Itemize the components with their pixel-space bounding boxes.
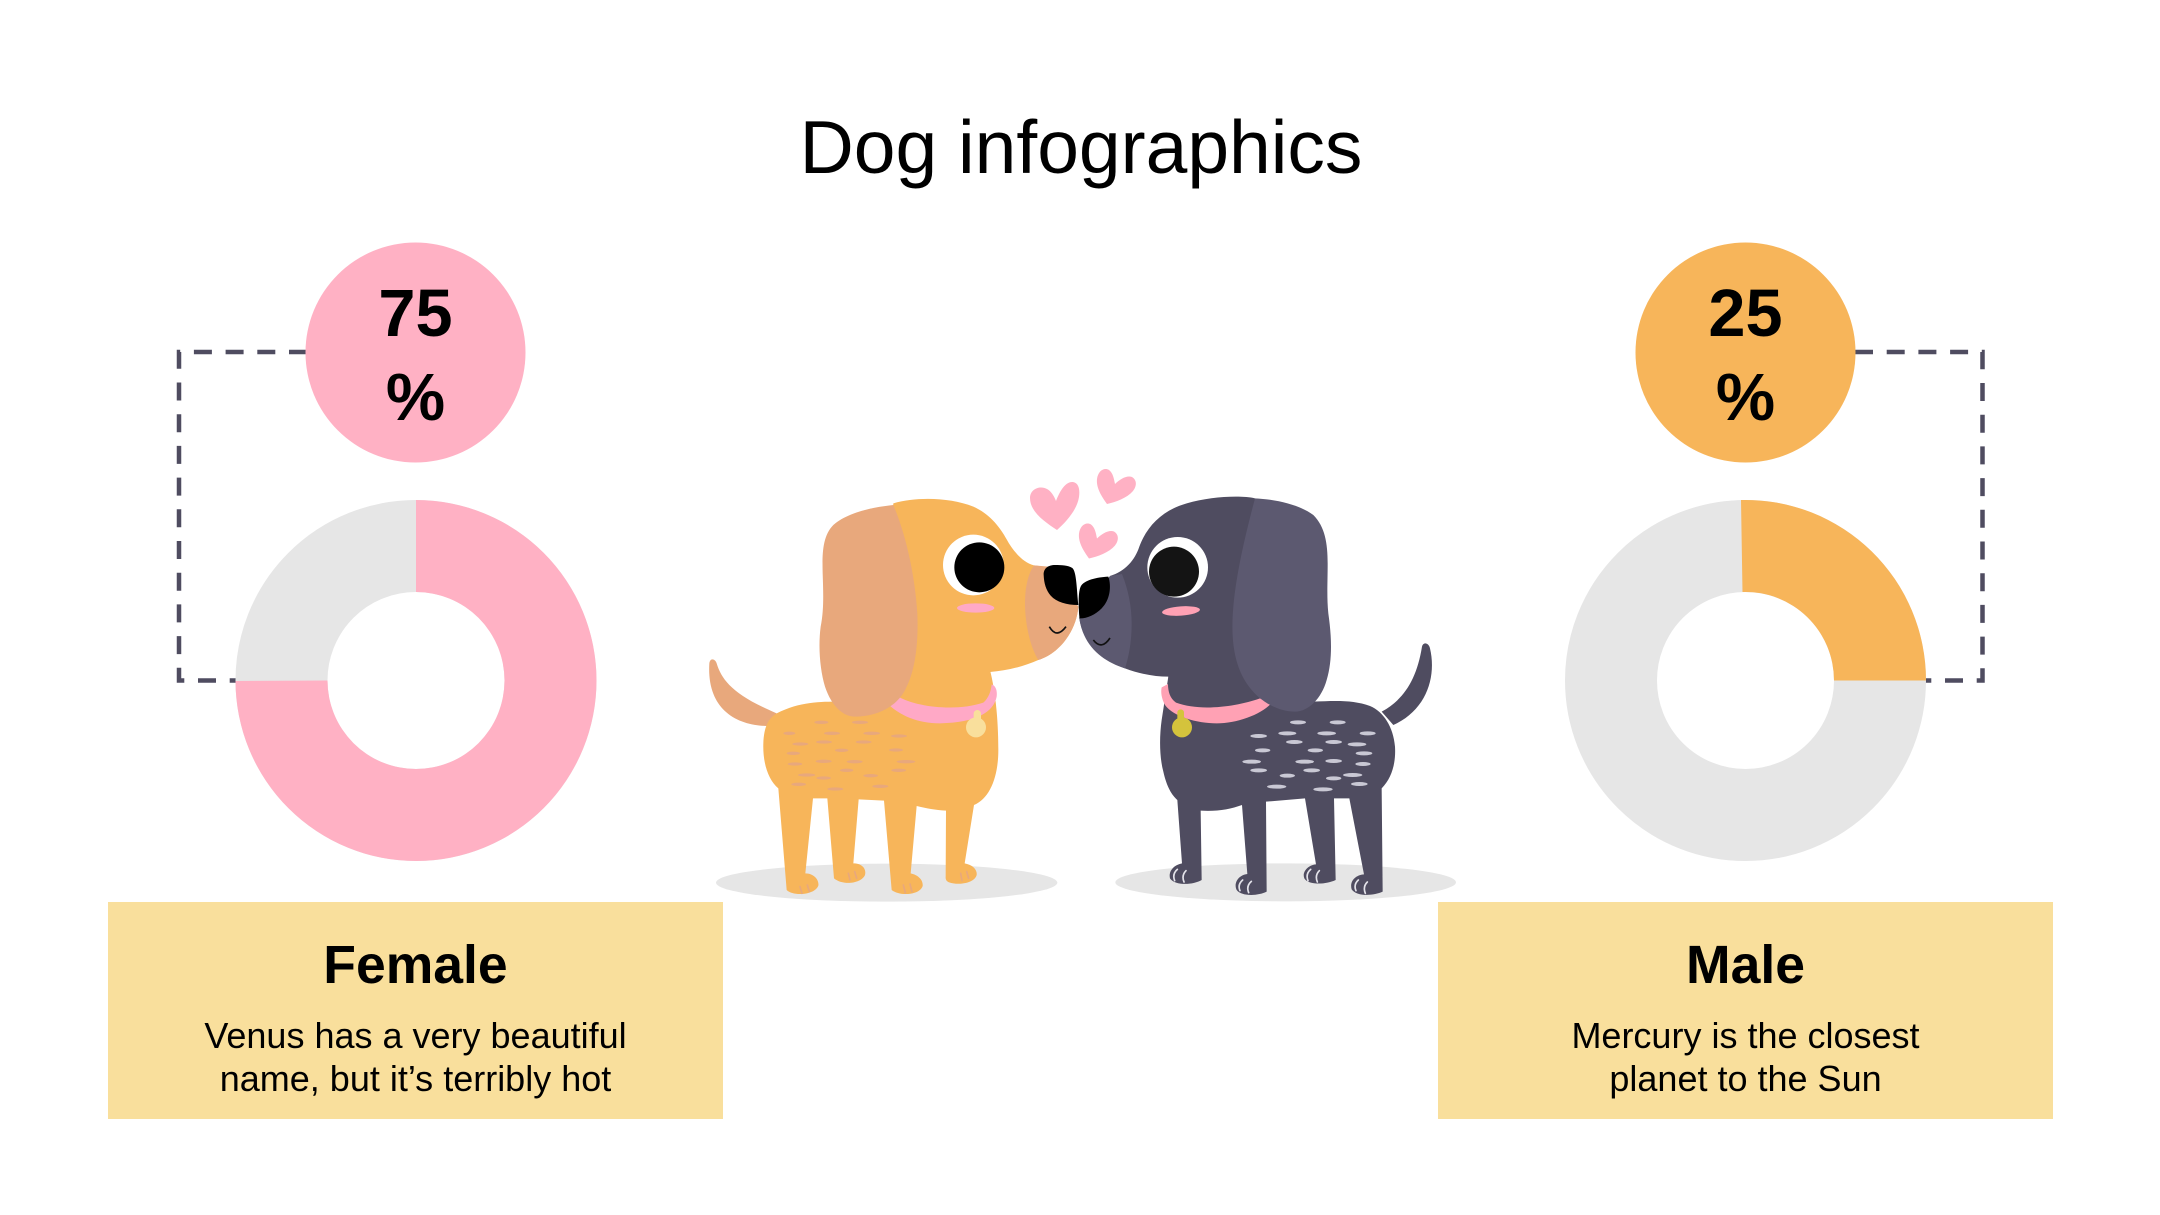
tail (1382, 643, 1432, 725)
donut chart: male 25 percent (1611, 500, 1926, 815)
badge: 25 percent: 25 (1708, 277, 1783, 351)
ground shadow (716, 864, 1057, 902)
name tag (966, 710, 986, 737)
claws (1174, 869, 1367, 893)
hearts (1030, 469, 1136, 558)
cheek (957, 603, 994, 613)
nose (1044, 565, 1078, 605)
badge: 75 percent: % (386, 361, 445, 435)
panel: female (108, 242, 723, 1119)
label box: female (108, 902, 723, 1119)
smile (1093, 638, 1110, 645)
badge: 25 percent (1636, 242, 1856, 462)
head (1079, 497, 1263, 707)
name tag (1172, 709, 1192, 737)
connector: female dashed line (179, 352, 307, 680)
label box: male: Mercury is the closest (1571, 1015, 1920, 1056)
nose (1079, 577, 1110, 618)
eye (1147, 537, 1208, 598)
eye (943, 535, 1004, 595)
smile (1049, 627, 1066, 633)
donut chart: female 75 percent (236, 500, 596, 861)
spots (1242, 720, 1376, 791)
title: Dog infographics (800, 105, 1362, 189)
badge: 75 percent (306, 242, 526, 462)
heart: top right (1097, 469, 1136, 504)
collar (889, 684, 997, 723)
muzzle (1025, 565, 1078, 660)
toes (800, 872, 969, 893)
label box: male (1438, 902, 2053, 1119)
ear (1232, 498, 1331, 712)
panel: male (1438, 242, 2053, 1119)
heart: large (1030, 482, 1079, 530)
collar (1161, 684, 1271, 723)
heart: small middle (1079, 524, 1118, 558)
muzzle (1079, 574, 1132, 668)
label box: female: Female (323, 936, 508, 995)
body and legs (763, 670, 998, 894)
illustration: dark dog (1079, 497, 1456, 901)
cheek (1162, 605, 1200, 617)
label box: female: Venus has a very beautiful (204, 1015, 627, 1056)
badge: 75 percent: 75 (378, 277, 453, 351)
head (890, 499, 1078, 703)
ground shadow (1115, 863, 1456, 901)
ear (819, 505, 918, 717)
fur marks (783, 721, 915, 791)
tail (709, 659, 777, 726)
body and legs (1160, 650, 1395, 895)
illustration: orange dog (709, 499, 1078, 902)
label box: male: planet to the Sun (1609, 1058, 1882, 1099)
connector: male dashed line (1855, 352, 1982, 680)
label box: female: name, but it’s terribly hot (220, 1058, 611, 1099)
label box: male: Male (1686, 936, 1805, 995)
badge: 25 percent: % (1716, 361, 1775, 435)
